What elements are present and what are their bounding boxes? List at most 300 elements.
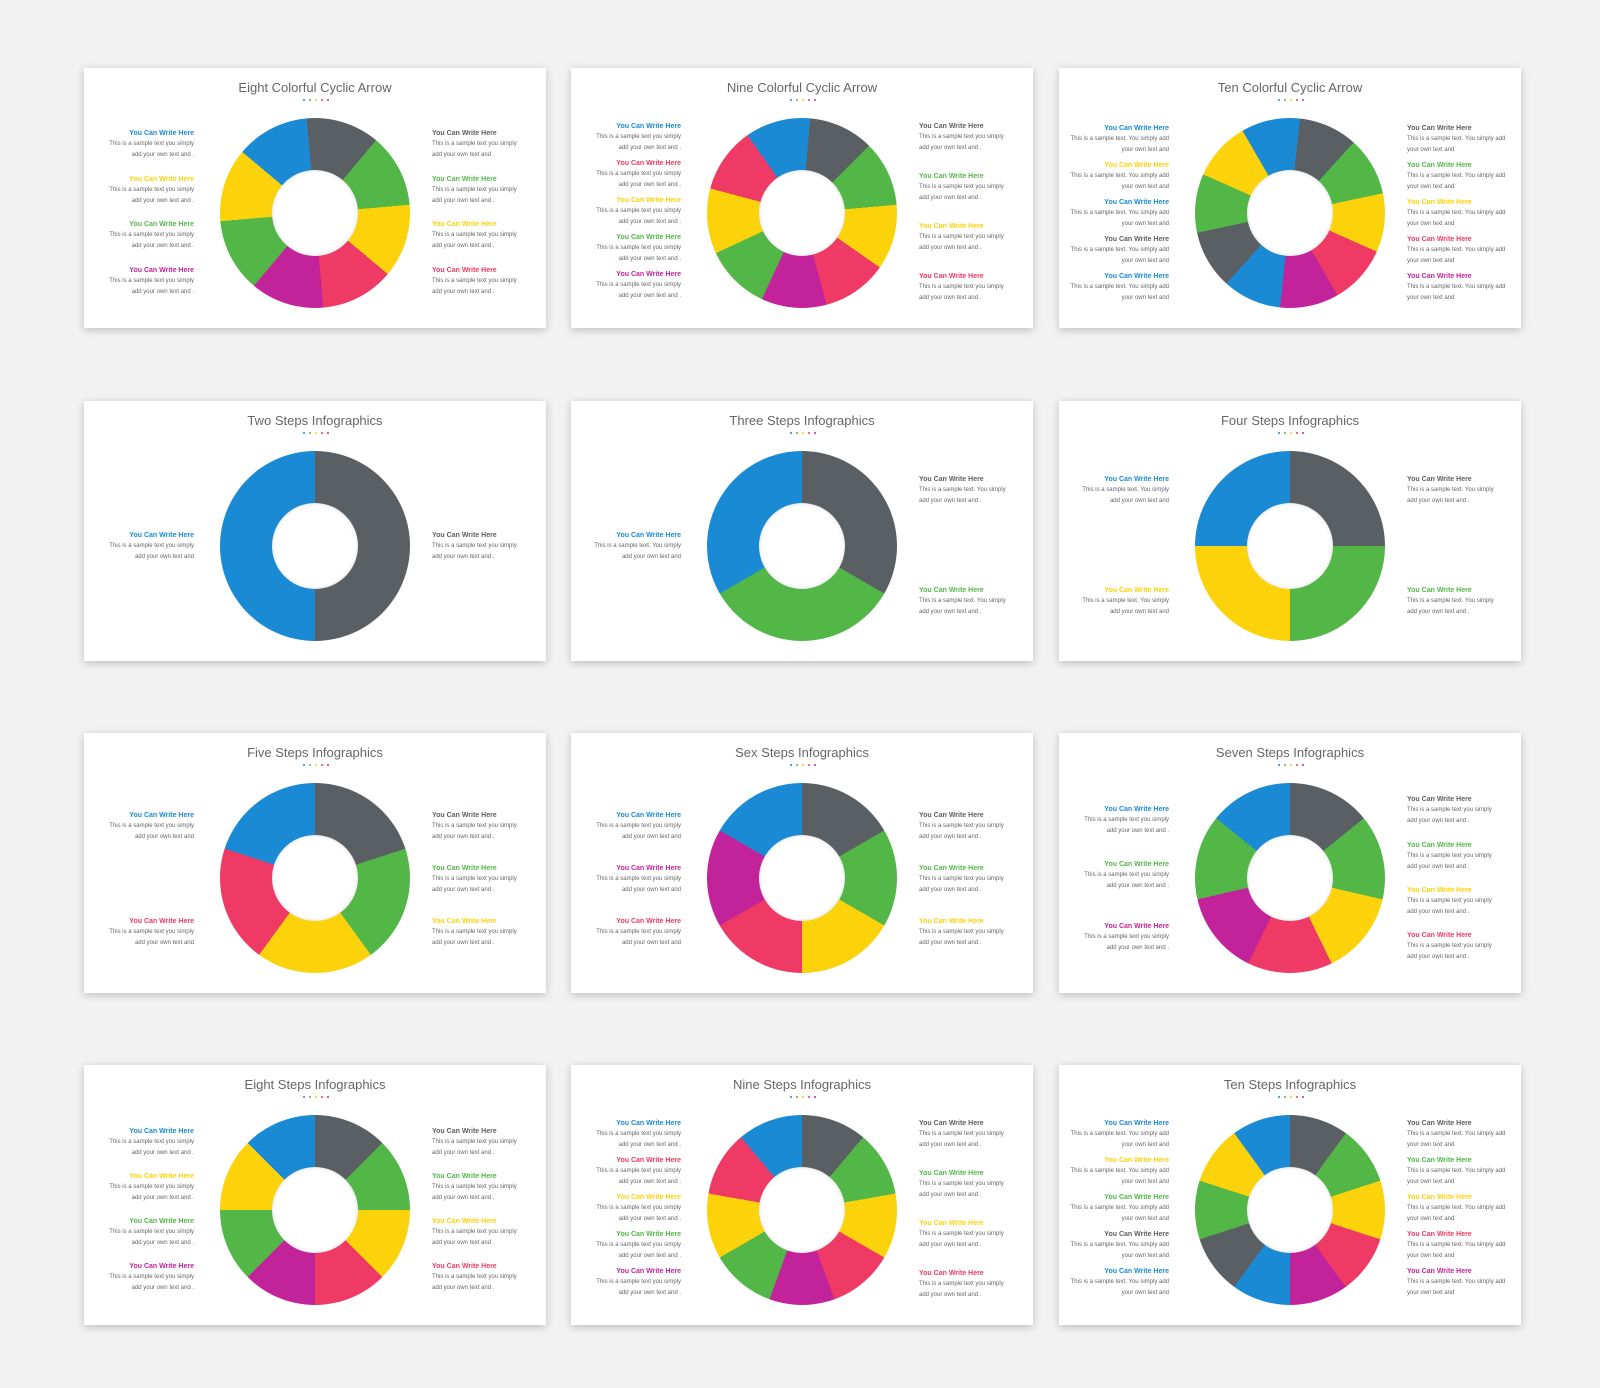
text block left 1: This is a sample text. You simply xyxy=(1082,487,1169,493)
title: Ten Steps Infographics xyxy=(1224,1077,1356,1092)
right text blocks: You Can Write Here xyxy=(1407,1268,1472,1275)
text block right 3: add your own text and . xyxy=(1407,909,1469,915)
text block right: This is a sample text you simply xyxy=(432,543,517,549)
text block right 1: You Can Write Here xyxy=(919,476,984,483)
text block right 1: This is a sample text you simply xyxy=(432,141,517,147)
text block right 1 xyxy=(432,812,517,840)
donut chart xyxy=(707,1115,897,1305)
title: Four Steps Infographics xyxy=(1221,413,1359,428)
right text blocks: add your own text and . xyxy=(432,1240,494,1246)
card: eight colorful cyclic arrow xyxy=(84,68,546,328)
text block left: add your own text and xyxy=(135,554,194,560)
text block right 3 xyxy=(432,918,517,946)
donut chart xyxy=(1195,1115,1385,1305)
text block left 1: You Can Write Here xyxy=(129,130,194,137)
text block right 4 xyxy=(1407,932,1492,960)
text block left 1: This is a sample text you simply xyxy=(1084,817,1169,823)
text block left 1 xyxy=(109,812,194,840)
text block right 2 xyxy=(1407,586,1494,615)
right text blocks xyxy=(1407,1118,1507,1299)
text block right 2: You Can Write Here xyxy=(432,176,497,183)
text block right: You Can Write Here xyxy=(432,532,497,539)
text block right xyxy=(432,532,517,560)
text block left: add your own text and xyxy=(622,554,681,560)
right text blocks: add your own text and . xyxy=(432,1150,494,1156)
right text blocks: You Can Write Here xyxy=(919,123,984,130)
left text blocks: your own text and xyxy=(1122,258,1169,264)
left text blocks: You Can Write Here xyxy=(1104,199,1169,206)
text block right 3: add your own text and . xyxy=(919,940,981,946)
text block right 3: This is a sample text you simply xyxy=(432,232,517,238)
text block right 2 xyxy=(919,586,1006,615)
title: Nine Steps Infographics xyxy=(733,1077,871,1092)
left text blocks: You Can Write Here xyxy=(1104,236,1169,243)
text block left 1: add your own text and . xyxy=(132,152,194,158)
text block right 2: This is a sample text you simply xyxy=(919,876,1004,882)
left text blocks xyxy=(109,1128,194,1291)
right text blocks xyxy=(919,1118,1019,1301)
card: five steps xyxy=(84,733,546,993)
right text blocks: This is a sample text you simply xyxy=(919,1131,1004,1137)
text block right 3: You Can Write Here xyxy=(1407,887,1472,894)
text block right 2: You Can Write Here xyxy=(1407,842,1472,849)
text block right: add your own text and . xyxy=(432,554,494,560)
text block right 1: This is a sample text you simply xyxy=(919,823,1004,829)
title: Seven Steps Infographics xyxy=(1216,745,1364,760)
text block left 2: You Can Write Here xyxy=(129,918,194,925)
text block right 3: You Can Write Here xyxy=(432,918,497,925)
left text blocks: This is a sample text you simply xyxy=(596,171,681,177)
left text blocks: You Can Write Here xyxy=(616,234,681,241)
left text blocks: You Can Write Here xyxy=(616,1194,681,1201)
left text blocks: add your own text and . xyxy=(132,1285,194,1291)
text block right 3: This is a sample text you simply xyxy=(919,929,1004,935)
text block left 3: add your own text and . xyxy=(1107,945,1169,951)
right text blocks: This is a sample text. You simply add xyxy=(1407,1168,1505,1174)
text block right 2: You Can Write Here xyxy=(919,865,984,872)
text block left 2: add your own text and . xyxy=(1107,883,1169,889)
left text blocks: This is a sample text you simply xyxy=(109,1139,194,1145)
text block right 2: add your own text and . xyxy=(919,887,981,893)
right text blocks: your own text and xyxy=(1407,184,1454,190)
left text blocks: your own text and xyxy=(1122,1142,1169,1148)
right text blocks: This is a sample text. You simply add xyxy=(1407,1205,1505,1211)
left text blocks: This is a sample text. You simply add xyxy=(1071,1279,1169,1285)
text block right 2 xyxy=(919,864,1004,893)
right text blocks: This is a sample text. You simply add xyxy=(1407,247,1505,253)
left text blocks: add your own text and . xyxy=(619,293,681,299)
left text blocks: This is a sample text. You simply add xyxy=(1071,136,1169,142)
right text blocks: You Can Write Here xyxy=(432,1128,497,1135)
left text blocks: You Can Write Here xyxy=(616,1268,681,1275)
text block right 2: You Can Write Here xyxy=(1407,587,1472,594)
left text blocks: This is a sample text. You simply add xyxy=(1071,210,1169,216)
donut chart xyxy=(220,1115,410,1305)
left text blocks: You Can Write Here xyxy=(129,1128,194,1135)
text block left 1: This is a sample text you simply xyxy=(109,823,194,829)
text block right 4: add your own text and . xyxy=(1407,954,1469,960)
text block left: This is a sample text you simply xyxy=(109,543,194,549)
text block left 1: add your own text and . xyxy=(1107,828,1169,834)
right text blocks: You Can Write Here xyxy=(1407,1231,1472,1238)
right text blocks: add your own text and . xyxy=(919,195,981,201)
text block left 2: add your own text and . xyxy=(132,198,194,204)
text block left 3: You Can Write Here xyxy=(129,221,194,228)
text block right 3: This is a sample text you simply xyxy=(1407,898,1492,904)
right text blocks: You Can Write Here xyxy=(432,1218,497,1225)
card: ten colorful cyclic arrow xyxy=(1059,68,1521,328)
left text blocks: You Can Write Here xyxy=(616,123,681,130)
text block left 4 xyxy=(109,266,194,295)
text block right 3 xyxy=(432,220,517,249)
text block left 4: You Can Write Here xyxy=(129,267,194,274)
left text blocks: This is a sample text you simply xyxy=(596,1279,681,1285)
card: three steps xyxy=(571,401,1033,661)
left text blocks: This is a sample text you simply xyxy=(596,1168,681,1174)
left text blocks: This is a sample text you simply xyxy=(596,1205,681,1211)
text block right 3: add your own text and . xyxy=(432,243,494,249)
donut chart xyxy=(1195,118,1385,308)
donut chart xyxy=(707,118,897,308)
title: Ten Colorful Cyclic Arrow xyxy=(1218,80,1362,95)
right text blocks: This is a sample text you simply xyxy=(919,134,1004,140)
right text blocks: You Can Write Here xyxy=(1407,125,1472,132)
left text blocks: You Can Write Here xyxy=(1104,1120,1169,1127)
right text blocks xyxy=(919,122,1004,301)
text block left 3: add your own text and xyxy=(622,940,681,946)
text block left 3 xyxy=(109,220,194,249)
text block right 3: add your own text and . xyxy=(432,940,494,946)
text block left 2 xyxy=(596,864,681,893)
text block right 1 xyxy=(1407,476,1494,504)
left text blocks: This is a sample text you simply xyxy=(596,1131,681,1137)
text block right 3 xyxy=(919,918,1004,946)
text block right 3: This is a sample text you simply xyxy=(432,929,517,935)
right text blocks: add your own text and . xyxy=(432,1195,494,1201)
left text blocks: This is a sample text. You simply add xyxy=(1071,1205,1169,1211)
text block left 2: You Can Write Here xyxy=(616,865,681,872)
left text blocks: your own text and xyxy=(1122,1179,1169,1185)
right text blocks: You Can Write Here xyxy=(919,173,984,180)
text block right 2: This is a sample text you simply xyxy=(432,187,517,193)
left text blocks: You Can Write Here xyxy=(616,160,681,167)
left text blocks: This is a sample text you simply xyxy=(596,282,681,288)
donut chart xyxy=(707,451,897,641)
text block right 4: add your own text and . xyxy=(432,289,494,295)
left text blocks: You Can Write Here xyxy=(129,1218,194,1225)
right text blocks: add your own text and . xyxy=(919,1142,981,1148)
left text blocks: You Can Write Here xyxy=(616,1120,681,1127)
left text blocks: your own text and xyxy=(1122,295,1169,301)
right text blocks: add your own text and . xyxy=(919,295,981,301)
title: Two Steps Infographics xyxy=(247,413,383,428)
left text blocks: You Can Write Here xyxy=(1104,1194,1169,1201)
card: six steps xyxy=(571,733,1033,993)
text block right 1: add your own text and . xyxy=(432,152,494,158)
left text blocks xyxy=(581,1118,681,1299)
card: eight steps xyxy=(84,1065,546,1325)
donut chart xyxy=(220,451,410,641)
text block left: This is a sample text. You simply xyxy=(594,543,681,549)
left text blocks: your own text and xyxy=(1122,1290,1169,1296)
right text blocks: You Can Write Here xyxy=(1407,162,1472,169)
left text blocks: This is a sample text you simply xyxy=(596,245,681,251)
right text blocks: This is a sample text. You simply add xyxy=(1407,1242,1505,1248)
text block right 4 xyxy=(432,266,517,295)
text block left 1: This is a sample text you simply xyxy=(109,141,194,147)
text block left 3: You Can Write Here xyxy=(1104,923,1169,930)
right text blocks: This is a sample text you simply xyxy=(919,284,1004,290)
donut chart xyxy=(220,783,410,973)
text block right 3: You Can Write Here xyxy=(919,918,984,925)
text block right 2 xyxy=(432,176,517,204)
right text blocks: This is a sample text you simply xyxy=(919,1181,1004,1187)
left text blocks: You Can Write Here xyxy=(616,271,681,278)
right text blocks: You Can Write Here xyxy=(919,1270,984,1277)
right text blocks: add your own text and . xyxy=(919,1192,981,1198)
left text blocks: add your own text and . xyxy=(619,1142,681,1148)
right text blocks: You Can Write Here xyxy=(432,1263,497,1270)
left text blocks: You Can Write Here xyxy=(1104,125,1169,132)
text block right 2: This is a sample text. You simply xyxy=(919,598,1006,604)
left text blocks: You Can Write Here xyxy=(1104,1268,1169,1275)
text block right 2: This is a sample text you simply xyxy=(1407,853,1492,859)
text block left 2: add your own text and xyxy=(135,940,194,946)
right text blocks: This is a sample text you simply xyxy=(432,1274,517,1280)
right text blocks: You Can Write Here xyxy=(1407,1194,1472,1201)
text block right 2 xyxy=(1407,842,1492,870)
text block right 1: add your own text and . xyxy=(432,834,494,840)
text block right 2: add your own text and . xyxy=(1407,609,1469,615)
text block left 2: add your own text and xyxy=(622,887,681,893)
donut chart xyxy=(1195,451,1385,641)
text block left 3: This is a sample text you simply xyxy=(596,929,681,935)
left text blocks: This is a sample text. You simply add xyxy=(1071,1242,1169,1248)
text block right 1: This is a sample text you simply xyxy=(1407,807,1492,813)
left text blocks: You Can Write Here xyxy=(1104,273,1169,280)
left text blocks: add your own text and . xyxy=(619,256,681,262)
text block left 1 xyxy=(1082,476,1169,504)
text block right 1: This is a sample text. You simply xyxy=(1407,487,1494,493)
left text blocks: This is a sample text you simply xyxy=(596,208,681,214)
text block right 1: You Can Write Here xyxy=(1407,796,1472,803)
right text blocks: your own text and xyxy=(1407,258,1454,264)
text block left 2: This is a sample text you simply xyxy=(109,187,194,193)
text block right 2: add your own text and . xyxy=(432,887,494,893)
text block left 4: This is a sample text you simply xyxy=(109,278,194,284)
left text blocks: add your own text and . xyxy=(619,1179,681,1185)
left text blocks: add your own text and . xyxy=(132,1195,194,1201)
text block left 3: This is a sample text you simply xyxy=(109,232,194,238)
right text blocks: This is a sample text you simply xyxy=(919,1231,1004,1237)
right text blocks: your own text and xyxy=(1407,1290,1454,1296)
text block left 1: You Can Write Here xyxy=(616,812,681,819)
right text blocks: This is a sample text. You simply add xyxy=(1407,136,1505,142)
title: Sex Steps Infographics xyxy=(735,745,869,760)
text block left 2: You Can Write Here xyxy=(1104,587,1169,594)
right text blocks: your own text and xyxy=(1407,1179,1454,1185)
right text blocks: your own text and xyxy=(1407,221,1454,227)
text block left 3: This is a sample text you simply xyxy=(1084,934,1169,940)
right text blocks: This is a sample text. You simply add xyxy=(1407,1131,1505,1137)
text block left 1: This is a sample text you simply xyxy=(596,823,681,829)
text block left xyxy=(109,532,194,560)
left text blocks: This is a sample text. You simply add xyxy=(1071,1168,1169,1174)
text block right 2: This is a sample text. You simply xyxy=(1407,598,1494,604)
text block left 3: add your own text and . xyxy=(132,243,194,249)
right text blocks: your own text and xyxy=(1407,1216,1454,1222)
text block left 2: You Can Write Here xyxy=(1104,861,1169,868)
title: Three Steps Infographics xyxy=(729,413,875,428)
left text blocks: This is a sample text you simply xyxy=(109,1184,194,1190)
left text blocks: add your own text and . xyxy=(619,1216,681,1222)
left text blocks: add your own text and . xyxy=(619,1253,681,1259)
right text blocks: You Can Write Here xyxy=(1407,1157,1472,1164)
text block left 3: You Can Write Here xyxy=(616,918,681,925)
donut chart xyxy=(220,118,410,308)
text block left 1: add your own text and xyxy=(135,834,194,840)
left text blocks: your own text and xyxy=(1122,221,1169,227)
text block left 2: This is a sample text you simply xyxy=(596,876,681,882)
text block right 1: You Can Write Here xyxy=(919,812,984,819)
title: Nine Colorful Cyclic Arrow xyxy=(727,80,877,95)
text block left 1: add your own text and xyxy=(1110,498,1169,504)
donut chart xyxy=(707,783,897,973)
right text blocks: You Can Write Here xyxy=(919,1220,984,1227)
text block left 1 xyxy=(109,130,194,158)
left text blocks xyxy=(1070,124,1169,301)
text block right 4: You Can Write Here xyxy=(1407,932,1472,939)
left text blocks: add your own text and . xyxy=(619,182,681,188)
text block right 1: add your own text and . xyxy=(919,498,981,504)
text block left 2 xyxy=(1082,586,1169,615)
card: ten steps xyxy=(1059,1065,1521,1325)
left text blocks: This is a sample text you simply xyxy=(109,1274,194,1280)
left text blocks: add your own text and . xyxy=(132,1240,194,1246)
text block left 1 xyxy=(596,812,681,840)
right text blocks: add your own text and . xyxy=(919,145,981,151)
text block right 1: You Can Write Here xyxy=(1407,476,1472,483)
title: Eight Colorful Cyclic Arrow xyxy=(238,80,392,95)
text block right 3 xyxy=(1407,886,1492,915)
left text blocks: This is a sample text you simply xyxy=(596,134,681,140)
left text blocks: This is a sample text. You simply add xyxy=(1071,247,1169,253)
title: Eight Steps Infographics xyxy=(245,1077,385,1092)
right text blocks: This is a sample text. You simply add xyxy=(1407,210,1505,216)
card: seven steps xyxy=(1059,733,1521,993)
left text blocks: your own text and xyxy=(1122,147,1169,153)
right text blocks: This is a sample text you simply xyxy=(919,184,1004,190)
right text blocks: You Can Write Here xyxy=(1407,199,1472,206)
text block right 1: This is a sample text. You simply xyxy=(919,487,1006,493)
text block right 2: add your own text and . xyxy=(1407,864,1469,870)
text block right 1: add your own text and . xyxy=(919,834,981,840)
text block right 1: add your own text and . xyxy=(1407,498,1469,504)
right text blocks: This is a sample text. You simply add xyxy=(1407,1279,1505,1285)
text block left 2 xyxy=(1084,860,1169,889)
left text blocks: You Can Write Here xyxy=(1104,162,1169,169)
left text blocks: your own text and xyxy=(1122,184,1169,190)
text block left 2 xyxy=(109,176,194,204)
text block left: You Can Write Here xyxy=(129,532,194,539)
left text blocks: You Can Write Here xyxy=(616,197,681,204)
right text blocks: your own text and xyxy=(1407,1253,1454,1259)
right text blocks: add your own text and . xyxy=(919,245,981,251)
right text blocks: your own text and xyxy=(1407,295,1454,301)
text block right 1 xyxy=(432,130,517,158)
right text blocks: You Can Write Here xyxy=(919,1170,984,1177)
left text blocks: This is a sample text you simply xyxy=(596,1242,681,1248)
right text blocks xyxy=(1407,124,1505,301)
text block left 2: This is a sample text you simply xyxy=(1084,872,1169,878)
text block right 1: add your own text and . xyxy=(1407,818,1469,824)
left text blocks xyxy=(1069,1118,1169,1299)
right text blocks xyxy=(432,1126,532,1294)
right text blocks: You Can Write Here xyxy=(919,1120,984,1127)
left text blocks: add your own text and . xyxy=(619,145,681,151)
left text blocks: You Can Write Here xyxy=(129,1263,194,1270)
text block left 4: add your own text and . xyxy=(132,289,194,295)
right text blocks: add your own text and . xyxy=(919,1242,981,1248)
donut chart xyxy=(1195,783,1385,973)
text block right 1: You Can Write Here xyxy=(432,130,497,137)
text block right 1: You Can Write Here xyxy=(432,812,497,819)
right text blocks: This is a sample text you simply xyxy=(432,1139,517,1145)
text block left 1: You Can Write Here xyxy=(1104,806,1169,813)
text block right 2: You Can Write Here xyxy=(919,587,984,594)
card: two steps xyxy=(84,401,546,661)
right text blocks: This is a sample text you simply xyxy=(919,1281,1004,1287)
text block right 4: You Can Write Here xyxy=(432,267,497,274)
right text blocks: your own text and xyxy=(1407,147,1454,153)
left text blocks xyxy=(596,122,681,299)
text block left 3 xyxy=(1084,922,1169,951)
right text blocks: This is a sample text you simply xyxy=(432,1229,517,1235)
right text blocks: add your own text and . xyxy=(919,1292,981,1298)
text block right 1 xyxy=(919,812,1004,840)
text block left 1 xyxy=(1084,806,1169,834)
text block left 1: You Can Write Here xyxy=(1104,476,1169,483)
left text blocks: your own text and xyxy=(1122,1253,1169,1259)
left text blocks: You Can Write Here xyxy=(616,1231,681,1238)
text block right 2 xyxy=(432,864,517,893)
right text blocks: your own text and xyxy=(1407,1142,1454,1148)
right text blocks: You Can Write Here xyxy=(1407,1120,1472,1127)
text block left 2: add your own text and xyxy=(1110,609,1169,615)
left text blocks: add your own text and . xyxy=(619,219,681,225)
card: nine steps xyxy=(571,1065,1033,1325)
text block left 2: You Can Write Here xyxy=(129,176,194,183)
right text blocks: You Can Write Here xyxy=(919,273,984,280)
text block right 4: This is a sample text you simply xyxy=(432,278,517,284)
text block right 1 xyxy=(919,476,1006,504)
left text blocks: This is a sample text. You simply add xyxy=(1071,284,1169,290)
text block left 1: add your own text and xyxy=(622,834,681,840)
text block right 2: You Can Write Here xyxy=(432,865,497,872)
left text blocks: You Can Write Here xyxy=(616,1157,681,1164)
right text blocks: This is a sample text. You simply add xyxy=(1407,284,1505,290)
right text blocks: You Can Write Here xyxy=(919,223,984,230)
left text blocks: your own text and xyxy=(1122,1216,1169,1222)
card: nine colorful cyclic arrow xyxy=(571,68,1033,328)
text block left 3 xyxy=(596,918,681,946)
right text blocks: You Can Write Here xyxy=(432,1173,497,1180)
left text blocks: You Can Write Here xyxy=(1104,1157,1169,1164)
right text blocks: add your own text and . xyxy=(432,1285,494,1291)
text block right 2: add your own text and . xyxy=(919,609,981,615)
left text blocks: This is a sample text. You simply add xyxy=(1071,1131,1169,1137)
text block left: You Can Write Here xyxy=(616,532,681,539)
